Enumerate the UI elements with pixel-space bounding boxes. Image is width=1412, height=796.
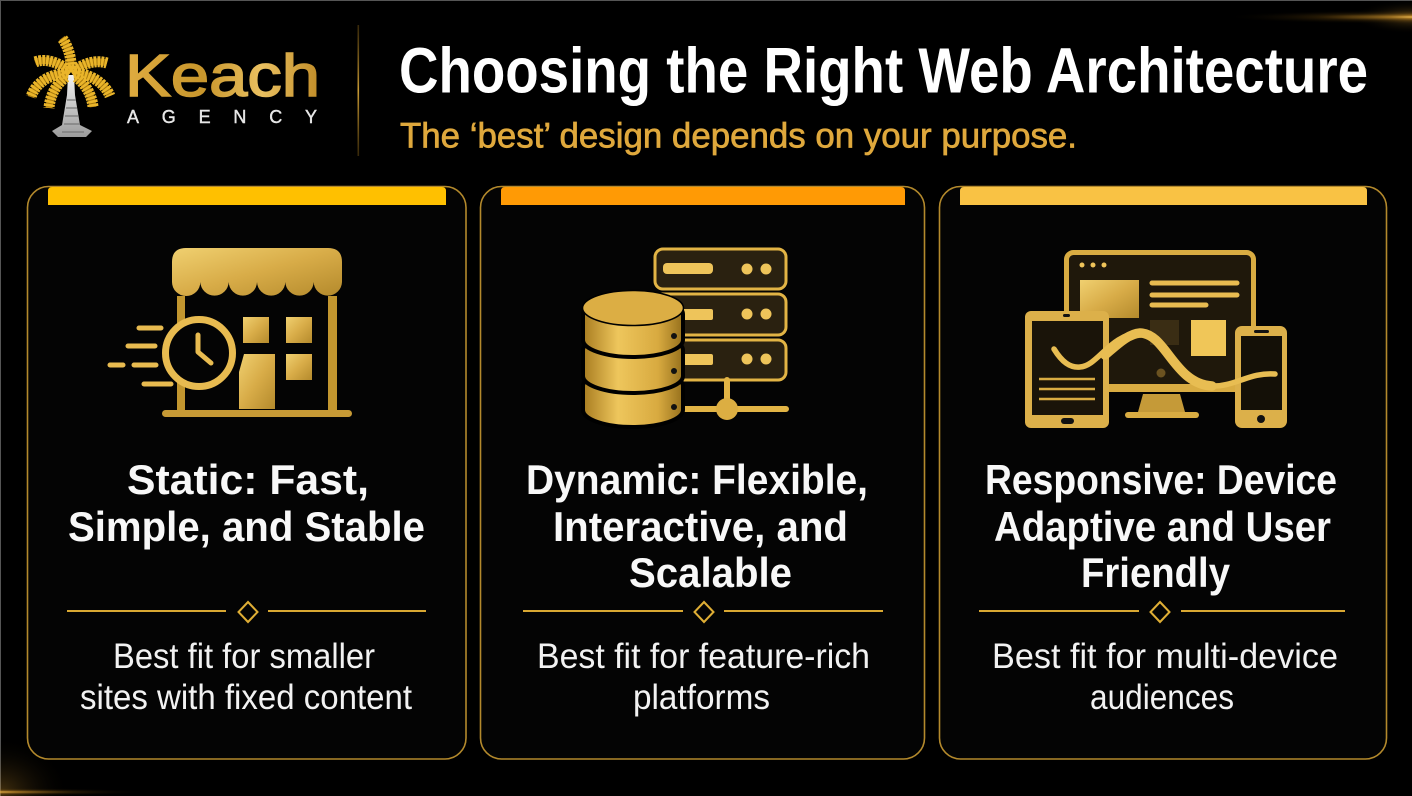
divider with diamond <box>67 602 426 622</box>
top accent bar <box>501 187 905 205</box>
divider with diamond <box>523 602 883 622</box>
panel: dynamic: Scalable <box>629 549 792 596</box>
top accent bar <box>960 187 1367 205</box>
panel: static: sites with fixed content <box>80 678 412 717</box>
description: Best fit for feature-rich <box>537 637 870 676</box>
wordmark: Keach: Keach <box>125 43 320 109</box>
icon: monitor, tablet and phone <box>1025 252 1287 428</box>
panel: dynamic <box>480 186 924 759</box>
panel: responsive: Friendly <box>1081 549 1231 596</box>
icon: database and servers <box>582 249 786 427</box>
glow: top right corner <box>1222 0 1412 34</box>
card outline <box>940 186 1386 759</box>
icon: palm tree <box>31 38 110 137</box>
card outline <box>28 186 466 759</box>
panel: responsive <box>940 186 1386 759</box>
panel: responsive: Adaptive and User <box>994 503 1331 550</box>
description: Best fit for multi-device <box>992 637 1338 676</box>
header divider <box>358 25 359 156</box>
divider with diamond <box>979 602 1345 622</box>
panel: dynamic: Interactive, and <box>553 503 848 550</box>
panel: responsive: audiences <box>1090 678 1234 717</box>
card outline <box>480 186 924 759</box>
logo: Keach Agency <box>31 38 320 137</box>
heading: Responsive: Device <box>985 456 1337 503</box>
wordmark: Agency: AGENCY <box>127 107 317 127</box>
panel: dynamic: platforms <box>633 678 770 717</box>
heading: Dynamic: Flexible, <box>526 456 868 503</box>
heading: Static: Fast, <box>127 456 369 503</box>
glow: bottom left corner <box>0 737 150 796</box>
icon: storefront with clock <box>110 248 352 417</box>
subtitle: The ‘best’ design depends on your purpose. <box>400 116 1077 156</box>
top accent bar <box>48 187 446 205</box>
panel: static <box>28 186 466 759</box>
panel: static: Simple, and Stable <box>68 503 425 550</box>
description: Best fit for smaller <box>113 637 375 676</box>
